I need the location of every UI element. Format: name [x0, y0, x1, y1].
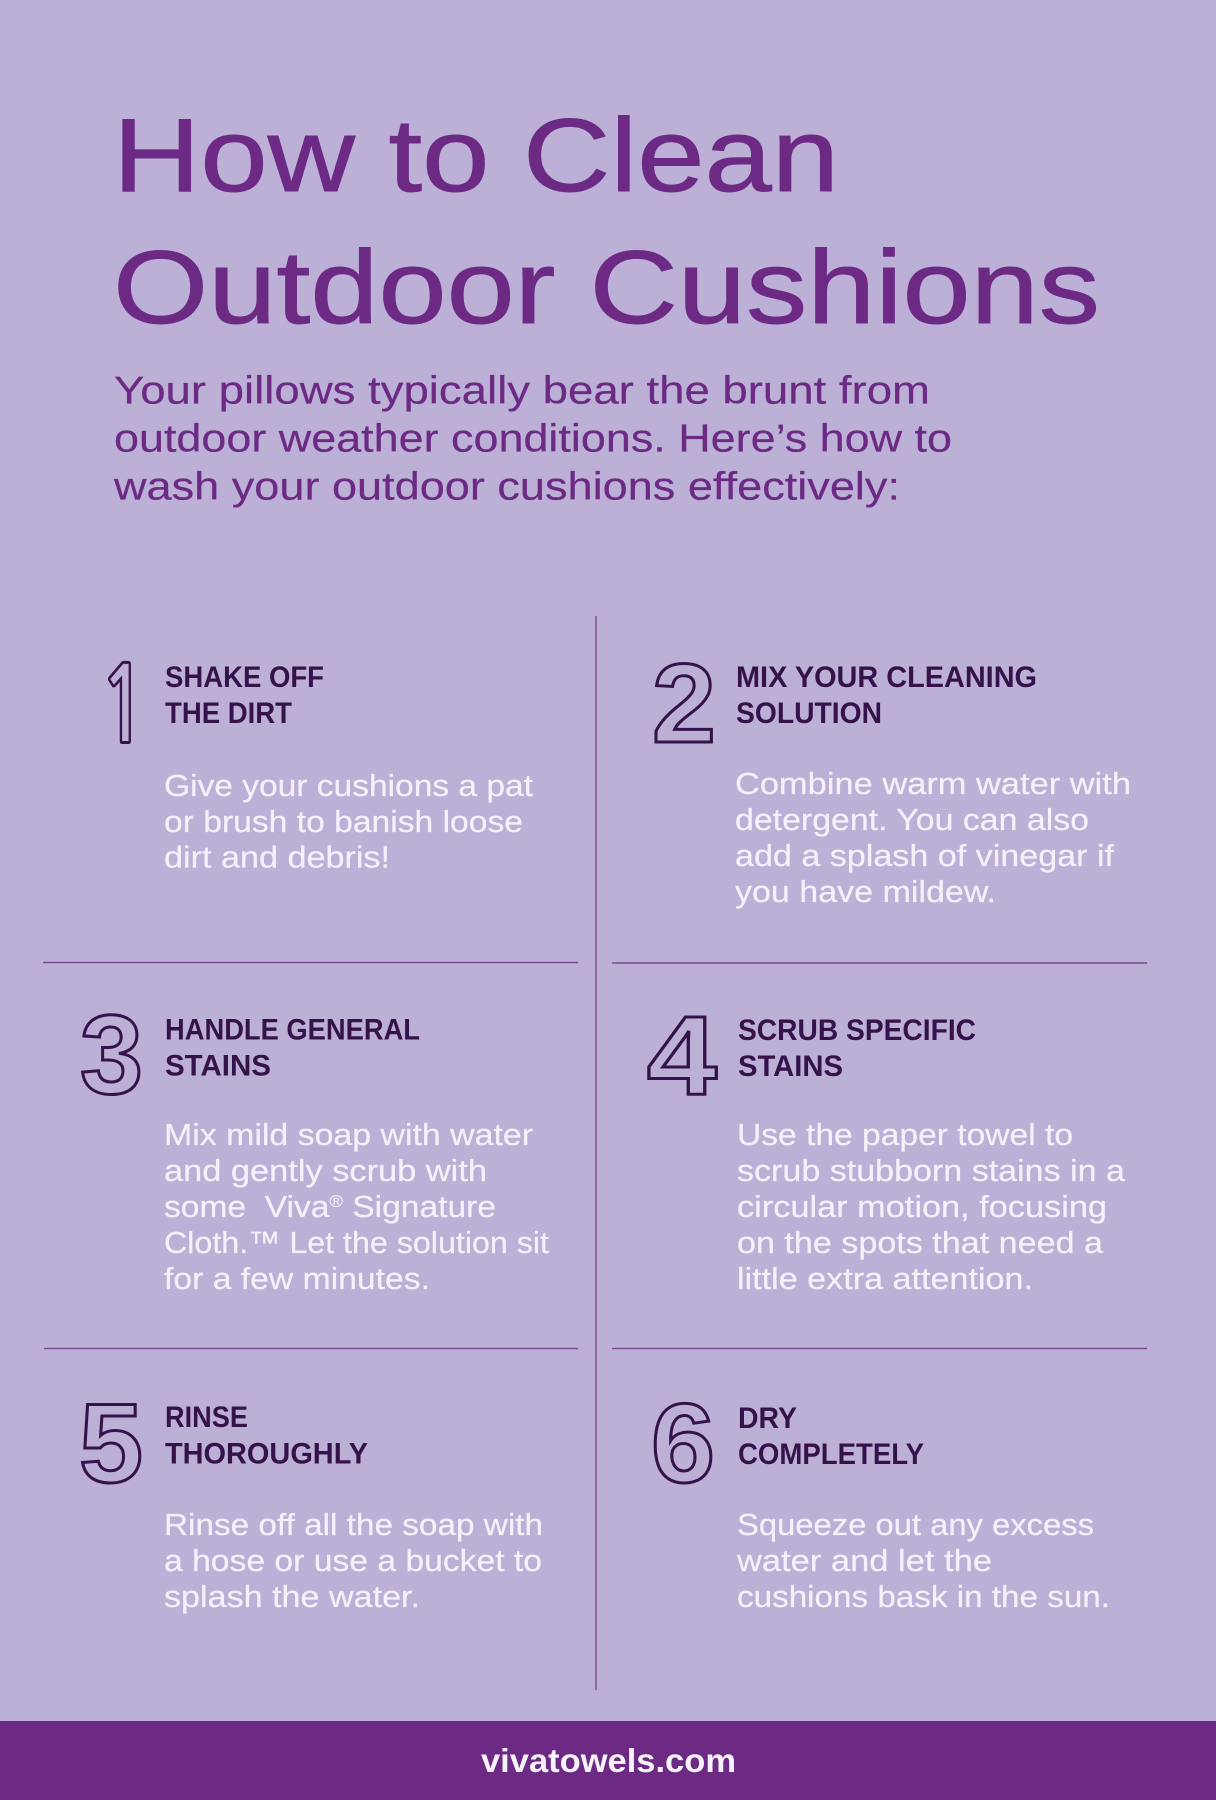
heading: rinse thoroughly: THOROUGHLY — [165, 1438, 368, 1470]
body text step 3: and gently scrub with — [164, 1153, 487, 1188]
body text step 4: scrub stubborn stains in a — [737, 1153, 1126, 1188]
intro text: Your pillows typically bear the brunt from — [114, 370, 930, 412]
body text step 2 — [735, 766, 1131, 909]
title — [113, 98, 1100, 346]
heading: scrub specific stains: STAINS — [738, 1050, 843, 1083]
heading: shake off the dirt: SHAKE OFF — [165, 661, 324, 694]
body text step 4: on the spots that need a — [737, 1225, 1104, 1260]
heading: shake off the dirt — [165, 661, 324, 730]
body text step 2: add a splash of vinegar if — [735, 838, 1114, 873]
number 2: 2 — [652, 641, 716, 766]
heading: rinse thoroughly — [165, 1401, 368, 1470]
panel: step 4 — [647, 994, 1126, 1296]
heading: handle general stains: STAINS — [165, 1050, 271, 1082]
body text step 3: Cloth.™ Let the solution sit — [164, 1225, 549, 1260]
heading: rinse thoroughly: RINSE — [165, 1401, 248, 1434]
body text step 5: Rinse off all the soap with — [164, 1507, 543, 1542]
heading: dry completely — [738, 1402, 924, 1471]
body text step 2: Combine warm water with — [735, 766, 1131, 801]
intro text: outdoor weather conditions. Here’s how to — [114, 418, 952, 460]
body text step 6 — [736, 1507, 1110, 1614]
heading: mix your cleaning solution: SOLUTION — [736, 697, 882, 730]
heading: dry completely: DRY — [738, 1402, 797, 1435]
footer bar — [0, 1721, 1216, 1800]
body text step 3 — [164, 1117, 549, 1296]
panel: step 3 — [80, 992, 549, 1296]
heading: handle general stains — [165, 1014, 420, 1082]
intro text: wash your outdoor cushions effectively: — [113, 466, 900, 508]
body text step 3: Signature — [343, 1189, 496, 1224]
panel: step 6 — [651, 1381, 1110, 1614]
body text step 1: or brush to banish loose — [164, 804, 523, 839]
number 1: 1 — [98, 654, 148, 758]
body text step 2: you have mildew. — [735, 874, 996, 909]
number 3: 3 — [80, 992, 143, 1117]
body text step 2: detergent. You can also — [735, 802, 1089, 837]
panel: step 5 — [79, 1381, 543, 1614]
body text step 1 — [164, 768, 533, 874]
heading: scrub specific stains: SCRUB SPECIFIC — [738, 1014, 976, 1047]
body text step 1: dirt and debris! — [164, 840, 390, 874]
body text step 4: little extra attention. — [737, 1261, 1033, 1296]
body text step 4: circular motion, focusing — [737, 1189, 1107, 1224]
heading: mix your cleaning solution: MIX YOUR CLEANING — [736, 661, 1037, 694]
number 4: 4 — [647, 994, 717, 1118]
number 6: 6 — [651, 1381, 715, 1506]
heading: scrub specific stains — [738, 1014, 976, 1083]
body text step 6: Squeeze out any excess — [737, 1507, 1094, 1542]
body text step 1: Give your cushions a pat — [164, 768, 533, 803]
body text step 3: Mix mild soap with water — [164, 1117, 533, 1152]
intro text — [113, 370, 952, 508]
title: How to Clean — [113, 98, 839, 214]
number 5: 5 — [79, 1381, 143, 1506]
body text step 6: water and let the — [736, 1543, 992, 1578]
panel: step 2 — [652, 641, 1131, 909]
body text step 3: for a few minutes. — [164, 1261, 430, 1296]
body text step 5: splash the water. — [164, 1579, 420, 1614]
body text step 5: a hose or use a bucket to — [164, 1543, 542, 1578]
body text step 5 — [164, 1507, 543, 1614]
heading: dry completely: COMPLETELY — [738, 1438, 924, 1471]
panel: step 1 — [98, 654, 533, 874]
heading: shake off the dirt: THE DIRT — [165, 697, 292, 730]
body text step 4: Use the paper towel to — [737, 1117, 1073, 1152]
body text step 6: cushions bask in the sun. — [737, 1579, 1110, 1614]
body text step 3: some Viva — [164, 1189, 317, 1224]
body text step 3: ® — [329, 1192, 343, 1211]
title: Outdoor Cushions — [113, 230, 1100, 346]
body text step 4 — [737, 1117, 1126, 1296]
heading: mix your cleaning solution — [736, 661, 1037, 730]
heading: handle general stains: HANDLE GENERAL — [165, 1014, 420, 1046]
website url: vivatowels.com — [481, 1742, 736, 1779]
